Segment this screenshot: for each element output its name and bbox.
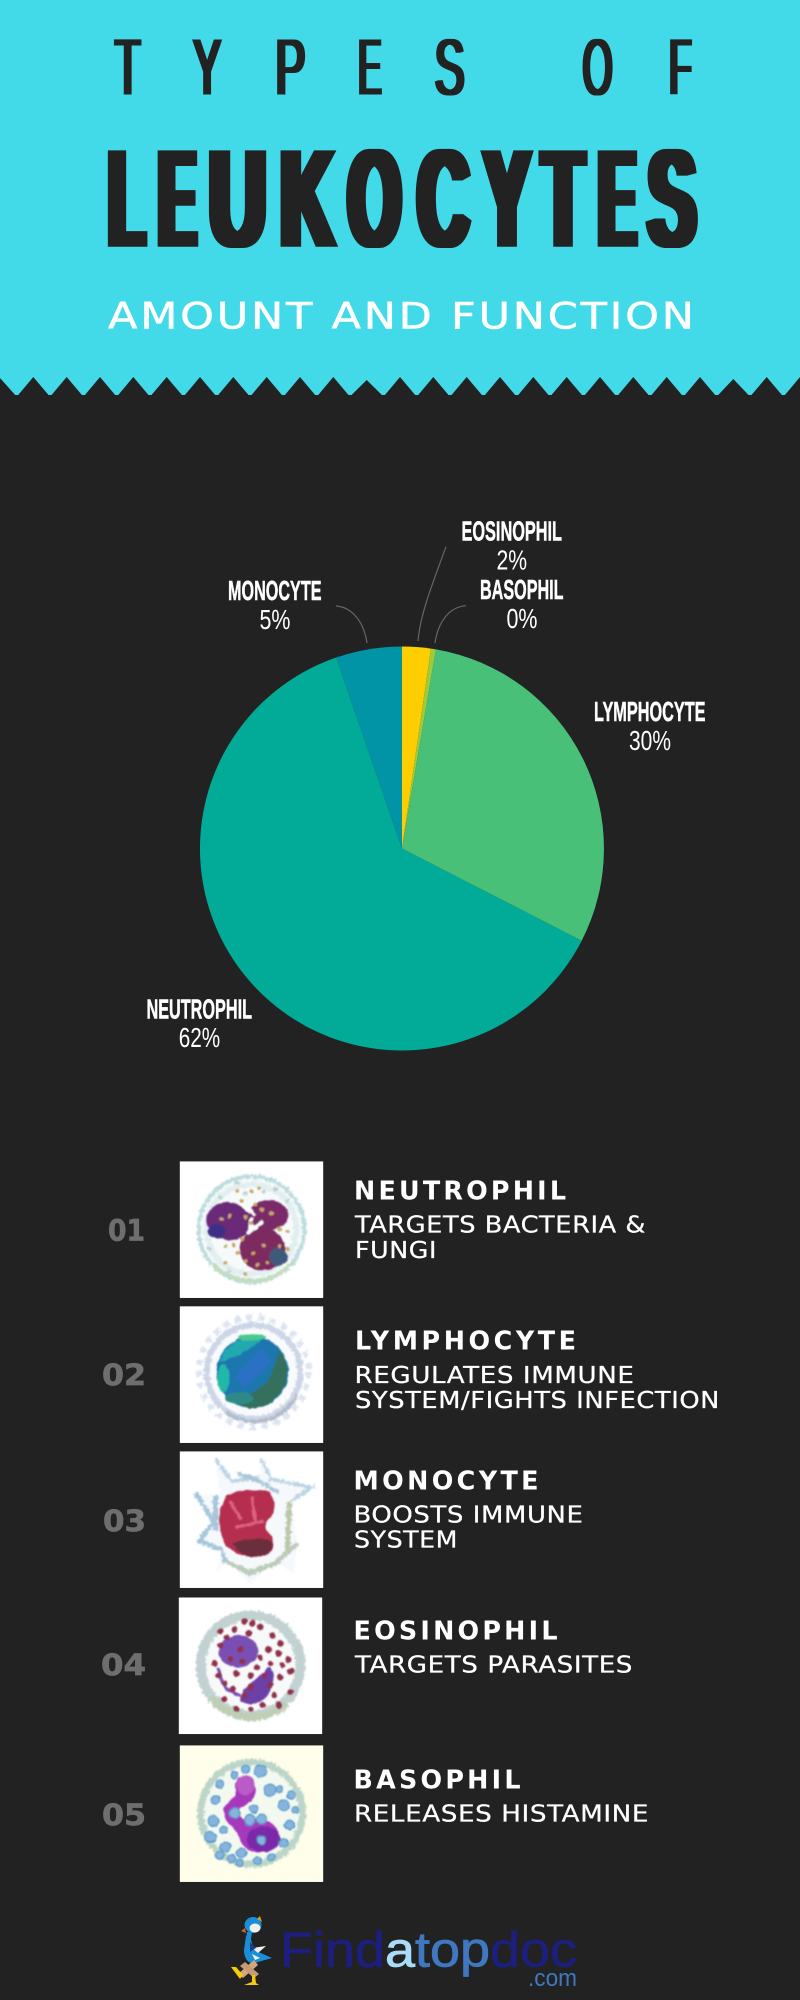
label: lymphocyte: LYMPHOCYTE [594, 696, 706, 727]
label: eosinophil: 2% [496, 544, 527, 575]
title: leukocytes [109, 120, 696, 277]
list text: lymphocyte: REGULATES IMMUNE [354, 1363, 634, 1389]
title: types of: O [583, 22, 612, 111]
title: types of: E [358, 22, 382, 111]
title: types of: S [435, 22, 464, 111]
slice: basophil 0% [402, 649, 436, 848]
header band with zigzag edge [0, 0, 800, 400]
leader line: basophil [435, 606, 466, 643]
logo: wordmark: Findatopdoc [280, 1924, 577, 1978]
list text: basophil: RELEASES HISTAMINE [354, 1802, 649, 1828]
list text: basophil: BASOPHIL [354, 1764, 520, 1794]
subtitle: AMOUNT AND FUNCTION [108, 295, 694, 337]
title: leukocytes: T [543, 120, 583, 277]
label: eosinophil [462, 516, 562, 575]
label: basophil: 0% [506, 603, 538, 634]
label: eosinophil: EOSINOPHIL [462, 516, 562, 547]
title: types of [115, 22, 692, 111]
number 01: 01 [108, 1214, 145, 1248]
cell image: neutrophil [180, 1161, 324, 1298]
list text: eosinophil: TARGETS PARASITES [354, 1653, 633, 1679]
slice: lymphocyte 30% [402, 649, 604, 941]
list text: monocyte [354, 1465, 584, 1554]
slice: monocyte 5% [336, 646, 402, 848]
list text: monocyte: SYSTEM [354, 1528, 458, 1554]
label: neutrophil: 62% [179, 1022, 220, 1053]
list text: monocyte: MONOCYTE [354, 1465, 538, 1495]
list text: basophil [354, 1764, 649, 1828]
label: neutrophil [146, 993, 252, 1053]
list text: neutrophil: FUNGI [355, 1238, 437, 1264]
label: basophil: BASOPHIL [480, 574, 564, 605]
label: lymphocyte: 30% [629, 725, 671, 756]
title: leukocytes: E [599, 120, 635, 277]
label: lymphocyte [594, 696, 706, 756]
label: monocyte: MONOCYTE [228, 575, 322, 606]
cell image: monocyte [180, 1451, 324, 1588]
logo: duck mascot [231, 1916, 272, 1985]
cell image: basophil [180, 1745, 324, 1882]
title: leukocytes: C [418, 120, 469, 277]
title: leukocytes: E [159, 120, 195, 277]
title: types of: Y [193, 22, 221, 111]
label: neutrophil: NEUTROPHIL [146, 993, 252, 1024]
list text: neutrophil: TARGETS BACTERIA & [354, 1213, 646, 1239]
list text: neutrophil: NEUTROPHIL [354, 1175, 566, 1205]
title: leukocytes: S [648, 120, 696, 277]
label: monocyte: 5% [260, 604, 290, 635]
title: types of: T [115, 22, 140, 111]
leader line: eosinophil [418, 547, 446, 641]
list text: lymphocyte: SYSTEM/FIGHTS INFECTION [355, 1388, 720, 1414]
number 03: 03 [103, 1504, 146, 1538]
slice: neutrophil 62% [200, 658, 582, 1050]
slice: eosinophil 2% [402, 646, 431, 848]
title: leukocytes: L [109, 120, 144, 277]
number 05: 05 [102, 1798, 146, 1832]
text: F [669, 22, 692, 111]
title: leukocytes: K [281, 120, 334, 277]
title: leukocytes: U [209, 120, 266, 277]
list text: neutrophil [354, 1175, 646, 1264]
list text: eosinophil [354, 1615, 633, 1679]
logo: wordmark: .com [528, 1965, 577, 1992]
title: types of: P [276, 22, 306, 111]
title: leukocytes: O [348, 120, 400, 277]
leader line: monocyte [336, 606, 367, 643]
label: basophil [480, 574, 564, 634]
label: monocyte [228, 575, 322, 635]
number 02: 02 [102, 1358, 146, 1392]
cell image: eosinophil [178, 1598, 322, 1734]
list text: eosinophil: EOSINOPHIL [354, 1615, 558, 1645]
pie chart [200, 646, 604, 1050]
list text: lymphocyte: LYMPHOCYTE [355, 1325, 576, 1355]
list text: lymphocyte [354, 1325, 720, 1414]
title: leukocytes: Y [484, 120, 530, 277]
list text: monocyte: BOOSTS IMMUNE [354, 1503, 584, 1529]
number 04: 04 [101, 1648, 146, 1682]
cell image: lymphocyte [180, 1306, 324, 1443]
